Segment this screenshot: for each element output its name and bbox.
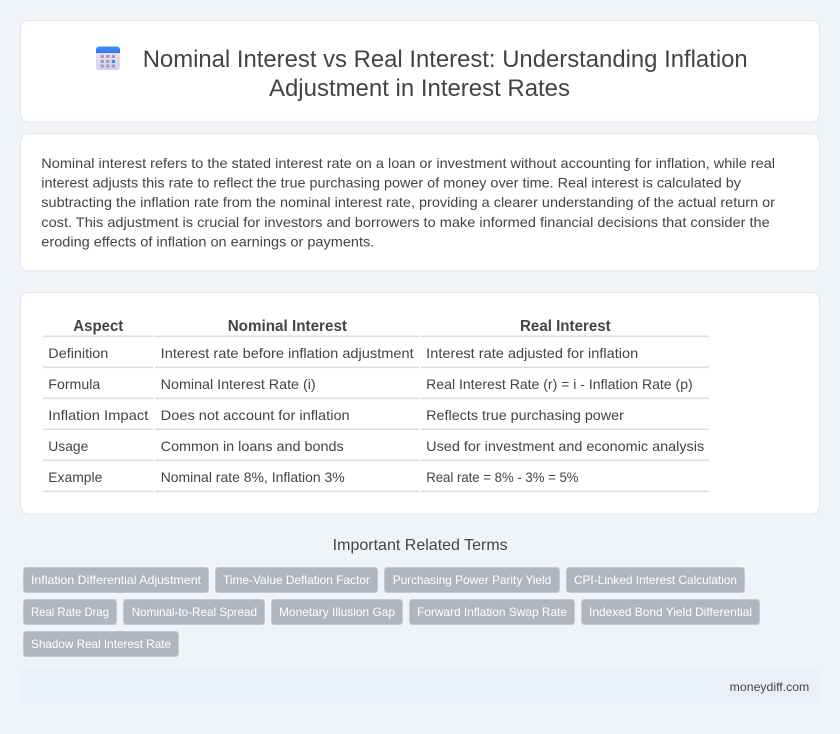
table row: inflation impact: Does not account for inflation — [161, 407, 350, 423]
table header: Nominal Interest — [228, 318, 348, 335]
text block: description paragraph: eroding effects of inflation on earnings or payments. — [41, 233, 374, 249]
table row: formula: Nominal Interest Rate (i) — [161, 376, 316, 392]
table row: example: Nominal rate 8%, Inflation 3% — [161, 469, 345, 485]
chip — [124, 600, 264, 624]
text block: description paragraph: Nominal interest refers to the stated interest rate on a loan or investment without accounting for inflation, while real — [41, 155, 775, 171]
chip — [24, 632, 178, 656]
table row: definition: Definition — [48, 345, 108, 361]
table row: definition: Interest rate adjusted for inflation — [426, 345, 638, 361]
text block: description paragraph — [41, 155, 775, 249]
related term chips — [24, 568, 760, 656]
panel: title header — [20, 20, 820, 122]
text block: description paragraph: subtracting the inflation rate from the nominal interest rate, providing a clearer understanding of the actual return or — [41, 194, 775, 210]
title: Adjustment in Interest Rates — [269, 75, 570, 102]
table row: formula: Real Interest Rate (r) = i - Inflation Rate (p) — [426, 376, 693, 392]
chip: CPI-Linked Interest Calculation — [574, 573, 737, 587]
table row: definition: Interest rate before inflation adjustment — [161, 345, 414, 361]
chip: Indexed Bond Yield Differential — [589, 605, 752, 619]
chip — [216, 568, 378, 592]
title: Nominal Interest vs Real Interest: Understanding Inflation — [143, 46, 748, 73]
chip: Time-Value Deflation Factor — [223, 573, 370, 587]
table row: formula — [48, 376, 693, 392]
table row: example — [48, 469, 579, 485]
table row: usage: Usage — [48, 438, 89, 454]
chip: Purchasing Power Parity Yield — [393, 573, 551, 587]
table row: usage: Used for investment and economic analysis — [426, 438, 704, 454]
chip — [384, 568, 560, 592]
table header: Aspect — [73, 318, 124, 335]
chip — [410, 600, 574, 624]
table row: definition — [48, 345, 638, 361]
table row: inflation impact: Inflation Impact — [48, 407, 148, 423]
table row: usage — [48, 438, 704, 454]
footer: moneydiff.com — [730, 680, 809, 694]
text block: description paragraph: cost. This adjustment is crucial for investors and borrowers to make informed financial decisions that consider the — [41, 214, 770, 230]
icon: calendar — [96, 46, 120, 70]
table row: example: Real rate = 8% - 3% = 5% — [426, 469, 578, 485]
chip — [566, 568, 744, 592]
chip — [582, 600, 760, 624]
chip: Inflation Differential Adjustment — [31, 573, 202, 587]
heading: important related terms: Important Related Terms — [333, 537, 508, 554]
table header — [73, 318, 611, 335]
chip: Forward Inflation Swap Rate — [417, 605, 567, 619]
panel: comparison table — [20, 292, 820, 514]
table row: formula: Formula — [48, 376, 101, 392]
table row: example: Example — [48, 469, 103, 485]
text block: description paragraph: interest adjusts this rate to reflect the true purchasing power of money over time. Real interest is calculated by — [41, 175, 741, 191]
chip: Nominal-to-Real Spread — [132, 605, 257, 619]
chip — [24, 568, 208, 592]
chip: Shadow Real Interest Rate — [31, 637, 171, 651]
panel: description — [20, 134, 820, 271]
table row: inflation impact: Reflects true purchasing power — [426, 407, 624, 423]
table header: Real Interest — [520, 318, 611, 335]
table row: inflation impact — [48, 407, 624, 423]
chip — [272, 600, 402, 624]
title — [143, 46, 748, 102]
chip: Real Rate Drag — [31, 605, 109, 619]
table row: usage: Common in loans and bonds — [161, 438, 344, 454]
chip — [24, 600, 116, 624]
chip: Monetary Illusion Gap — [279, 605, 395, 619]
footer — [20, 670, 820, 704]
